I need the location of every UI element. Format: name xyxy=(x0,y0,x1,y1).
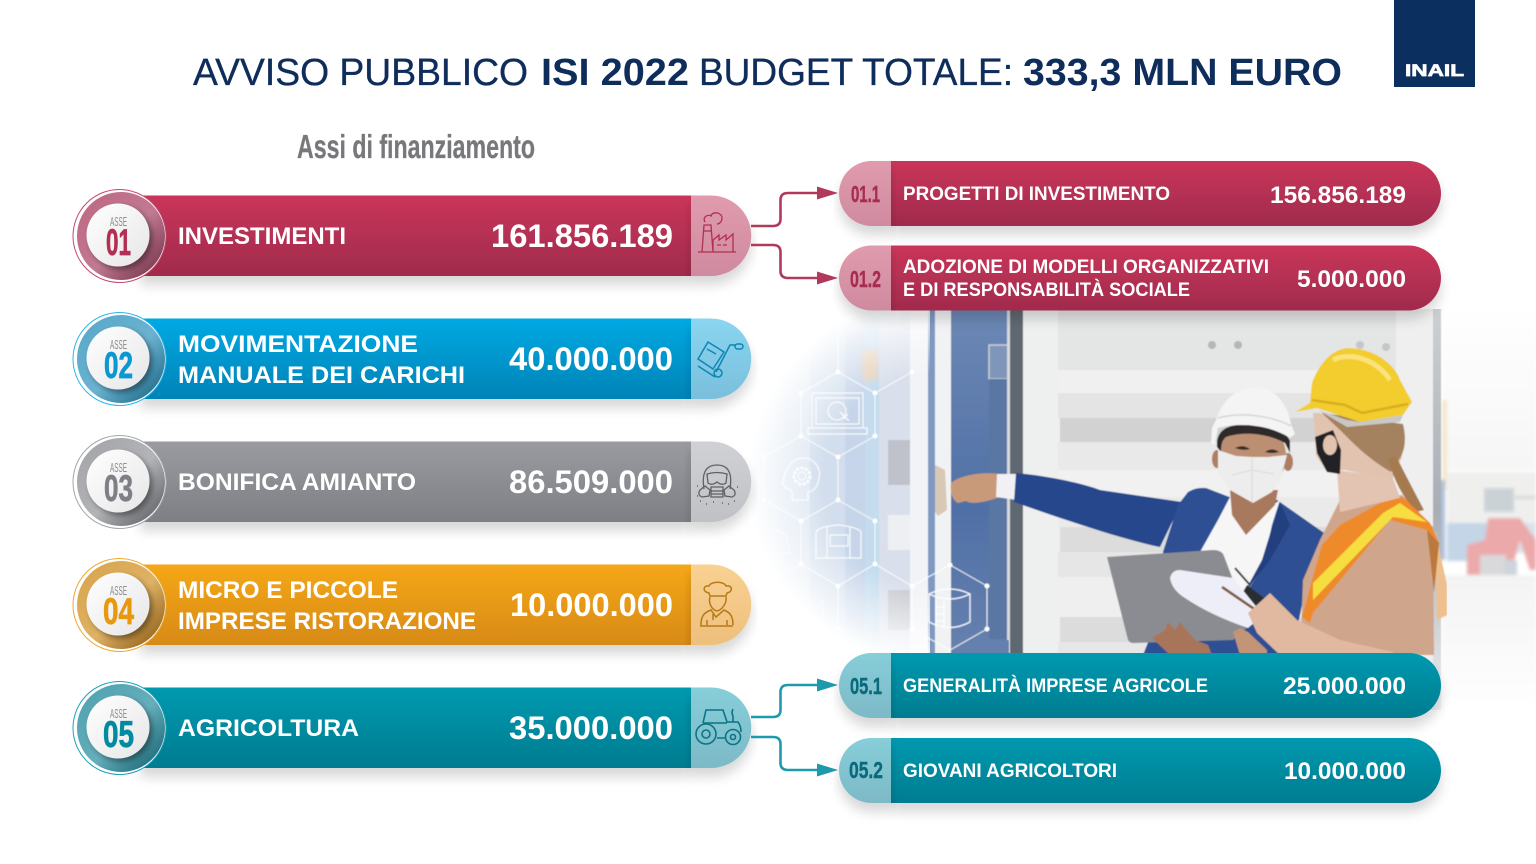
panel: 01.2 adozione di modelli organizzativi: 5.000.000 xyxy=(1297,266,1406,293)
panel: 01.1 progetti di investimento: PROGETTI DI INVESTIMENTO xyxy=(903,183,1170,205)
panel: 01.1 progetti di investimento: 01.1 xyxy=(851,181,880,207)
logo: INAIL: INAIL xyxy=(1405,61,1464,80)
arrow: investimenti to 01.1 xyxy=(751,186,838,226)
icon: chef xyxy=(700,582,733,626)
panel: 01.2 adozione di modelli organizzativi: 01.2 xyxy=(850,266,881,292)
subtitle: assi di finanziamento: Assi di finanziamento xyxy=(297,128,535,165)
badge 05: ASSE xyxy=(110,706,127,721)
icon: factory xyxy=(698,213,736,252)
badge 01: 01 xyxy=(106,222,131,263)
panel: 01.2 adozione di modelli organizzativi: ADOZIONE DI MODELLI ORGANIZZATIVI xyxy=(903,256,1269,278)
icon: gas mask xyxy=(697,465,738,504)
badge 05 xyxy=(73,682,166,774)
badge 03: ASSE xyxy=(110,460,127,475)
panel: asse 03 bonifica amianto: 86.509.000 xyxy=(509,464,673,500)
icon: tractor xyxy=(696,709,741,744)
distant yard on the right xyxy=(1440,398,1536,618)
panel: asse 01 investimenti xyxy=(73,190,751,282)
badge 05: 05 xyxy=(103,714,134,755)
badge 03 xyxy=(73,436,166,528)
panel: 05.2 giovani agricoltori xyxy=(839,738,1441,803)
badge 02 xyxy=(73,312,166,406)
container door and wall xyxy=(935,300,1441,720)
panel: 01.1 progetti di investimento: 156.856.189 xyxy=(1270,182,1406,209)
badge 01: ASSE xyxy=(110,214,127,229)
panel: 01.1 progetti di investimento xyxy=(839,161,1441,226)
arrow: agricoltura to 05.1 xyxy=(751,678,838,717)
panel: asse 03 bonifica amianto: BONIFICA AMIANTO xyxy=(178,469,416,496)
arrow: investimenti to 01.2 xyxy=(751,245,838,284)
badge 04: ASSE xyxy=(110,583,127,598)
badge 04 xyxy=(73,558,166,652)
panel: 05.2 giovani agricoltori: 05.2 xyxy=(849,757,883,783)
panel: 01.2 adozione di modelli organizzativi: E DI RESPONSABILITÀ SOCIALE xyxy=(903,278,1190,301)
photo: workers in front of container xyxy=(740,300,1536,720)
title: AVVISO PUBBLICO xyxy=(193,52,528,94)
title: ISI 2022 xyxy=(541,52,689,94)
badge 01 xyxy=(73,190,166,282)
photo body softened xyxy=(740,300,1447,720)
panel: asse 05 agricoltura: AGRICOLTURA xyxy=(178,715,359,742)
arrow: agricoltura to 05.2 xyxy=(751,737,838,776)
panel: asse 04 micro e piccole imprese ristorazione: 10.000.000 xyxy=(510,587,673,623)
title: 333,3 MLN EURO xyxy=(1023,52,1342,94)
panel: 05.2 giovani agricoltori: 10.000.000 xyxy=(1284,758,1406,785)
panel: asse 01 investimenti: INVESTIMENTI xyxy=(178,223,346,250)
woman with yellow helmet xyxy=(1248,348,1447,658)
panel: 05.1 generalità imprese agricole: 25.000.000 xyxy=(1283,673,1406,700)
panel: asse 02 movimentazione manuale dei carichi xyxy=(73,312,751,406)
laptop, hands and clipboard xyxy=(1107,550,1280,655)
panel: asse 02 movimentazione manuale dei carichi: MANUALE DEI CARICHI xyxy=(178,362,465,389)
panel: asse 03 bonifica amianto xyxy=(73,436,751,528)
icon: hand truck with box xyxy=(698,342,743,377)
panel: asse 02 movimentazione manuale dei carichi: 40.000.000 xyxy=(509,341,673,377)
panel: asse 05 agricoltura: 35.000.000 xyxy=(509,710,673,746)
left blurred background with hexagon network xyxy=(766,310,936,653)
badge 02: ASSE xyxy=(110,337,127,352)
man pointing xyxy=(951,387,1327,655)
hexagon network with icons xyxy=(782,354,988,650)
badge 03: 03 xyxy=(104,468,133,509)
panel: asse 04 micro e piccole imprese ristorazione xyxy=(73,558,751,652)
panel: 01.2 adozione di modelli organizzativi xyxy=(839,246,1441,310)
panel: 05.1 generalità imprese agricole xyxy=(839,653,1441,718)
panel: 05.2 giovani agricoltori: GIOVANI AGRICOLTORI xyxy=(903,760,1117,782)
title: BUDGET TOTALE: xyxy=(699,52,1013,94)
logo: INAIL xyxy=(1394,0,1475,87)
panel: 05.1 generalità imprese agricole: 05.1 xyxy=(850,673,882,699)
badge 04: 04 xyxy=(103,591,134,632)
panel: asse 04 micro e piccole imprese ristorazione: MICRO E PICCOLE xyxy=(178,577,398,604)
panel: asse 02 movimentazione manuale dei carichi: MOVIMENTAZIONE xyxy=(178,331,418,358)
panel: 05.1 generalità imprese agricole: GENERALITÀ IMPRESE AGRICOLE xyxy=(903,674,1208,697)
panel: asse 04 micro e piccole imprese ristorazione: IMPRESE RISTORAZIONE xyxy=(178,608,476,635)
panel: asse 05 agricoltura xyxy=(73,682,751,774)
panel: asse 01 investimenti: 161.856.189 xyxy=(491,218,673,254)
badge 02: 02 xyxy=(104,345,133,386)
title xyxy=(193,52,1342,94)
